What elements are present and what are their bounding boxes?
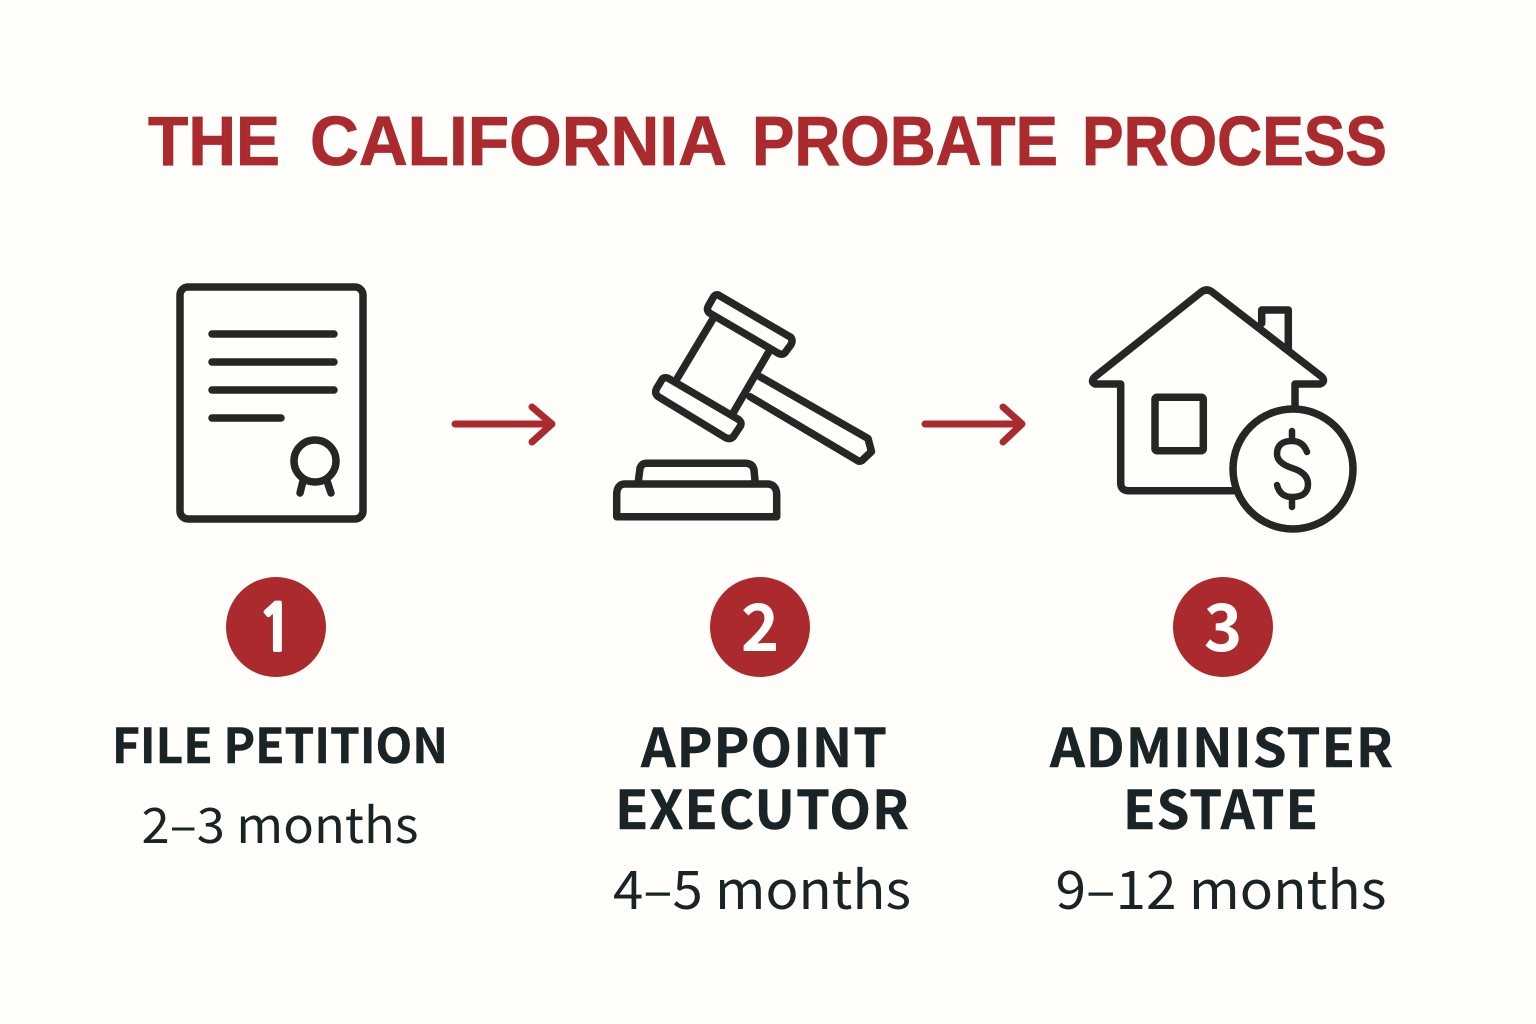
arrow: step 2 to step 3 (925, 407, 1022, 442)
arrow: step 1 to step 2 (455, 407, 552, 442)
step 3 badge: 3 (1204, 576, 1242, 670)
icon: petition document (180, 287, 363, 519)
title (148, 102, 1387, 180)
title: PROBATE (752, 102, 1058, 180)
step 2 text: EXECUTOR (615, 769, 910, 845)
step 3 text: ESTATE (1123, 769, 1319, 845)
icon: house with dollar coin (1092, 290, 1353, 529)
step 2 badge (710, 576, 810, 677)
step 1 text: FILE PETITION (112, 707, 448, 777)
step 1 text: 2–3 months (142, 787, 419, 858)
step 2 text (613, 707, 911, 925)
title: CALIFORNIA (310, 102, 727, 180)
icon: gavel (617, 295, 872, 517)
step 1 badge (226, 577, 326, 677)
step 2 text: 4–5 months (613, 849, 911, 925)
step 2 badge: 2 (741, 576, 779, 670)
step 1 badge: 1 (256, 596, 296, 661)
step 3 text (1049, 707, 1394, 925)
title: THE (148, 102, 280, 180)
title: PROCESS (1082, 102, 1387, 180)
step 3 text: ADMINISTER (1049, 707, 1394, 783)
step 3 badge (1173, 576, 1273, 677)
step 2 text: APPOINT (640, 707, 888, 783)
step 3 text: 9–12 months (1056, 849, 1386, 925)
step 1 text (112, 707, 448, 858)
